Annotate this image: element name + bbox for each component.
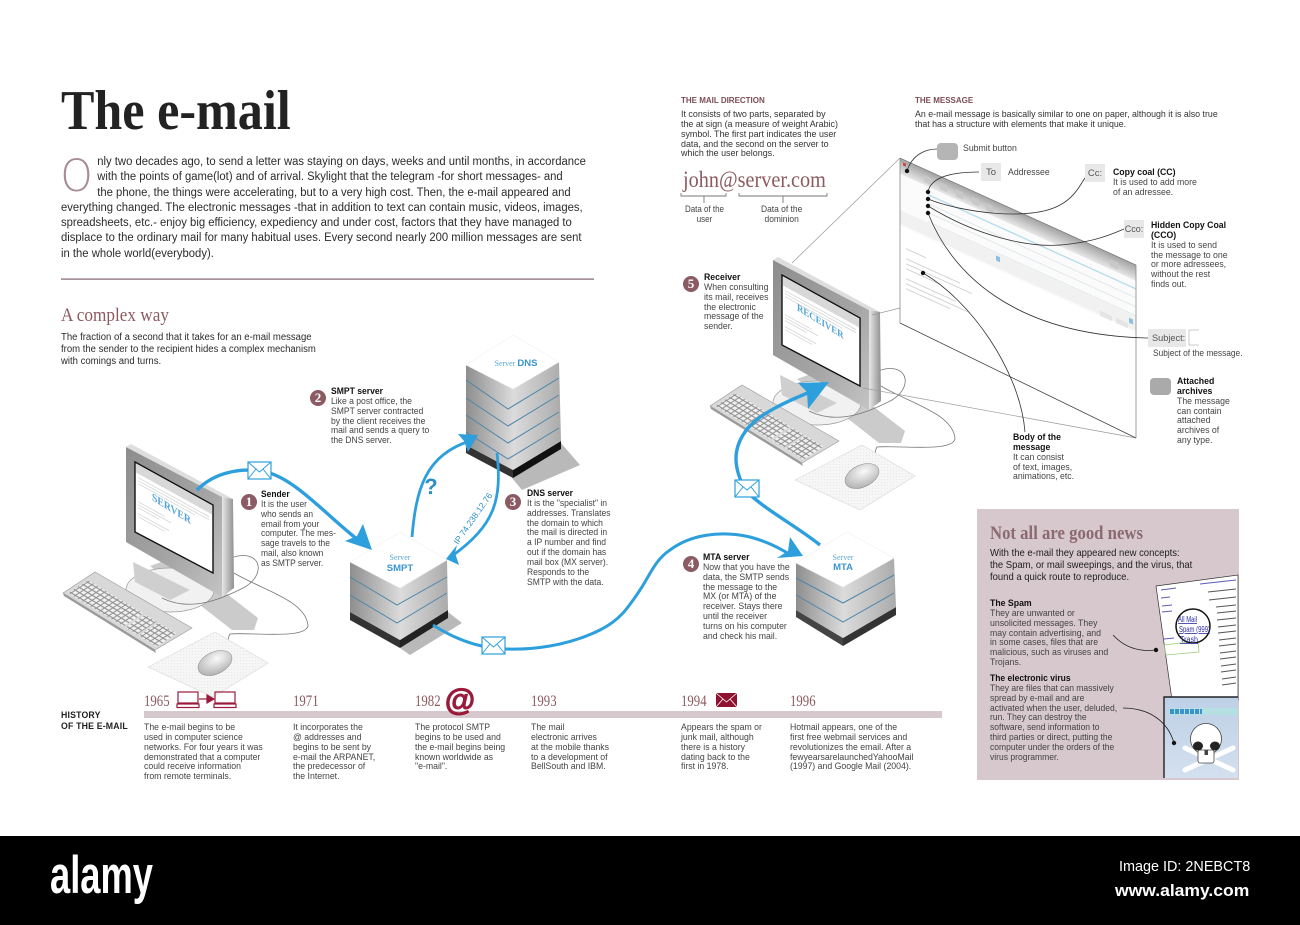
text: copy coal: It is used to add more	[1113, 176, 1197, 187]
text: DNS server: out if the domain has	[527, 546, 606, 557]
image id: Image ID: 2NEBCT8	[1119, 858, 1250, 875]
year 1982: 1982	[415, 693, 441, 710]
intro paragraph: displace to the ordinary mail for many habitual uses. Every second nearly 200 million messages are sent	[61, 232, 582, 244]
text: MTA server: and check his mail.	[703, 630, 777, 641]
text: DNS server: the domain to which	[527, 517, 603, 528]
server: SMPT: SMPT	[387, 563, 413, 574]
text 1993	[531, 721, 609, 771]
text: the spam: unsolicited messages. They	[990, 617, 1097, 628]
timeline bar	[144, 711, 942, 718]
heading: a complex way: A complex way	[61, 305, 169, 326]
text: body of the message: It can consist	[1013, 451, 1064, 462]
text: hidden copy coal: or more adressees,	[1151, 258, 1226, 269]
text: sender: mail, also known	[261, 547, 323, 558]
text: copy coal	[1113, 166, 1197, 197]
text: sender: as SMTP server.	[261, 557, 323, 568]
text: the message: that has a structure with elements that make it unique.	[915, 118, 1126, 129]
text: sender: computer. The mes-	[261, 527, 336, 538]
number 5	[683, 276, 699, 292]
leader lines for message elements	[907, 149, 1148, 432]
icon: submit button	[937, 143, 958, 160]
year 1993: 1993	[531, 693, 557, 710]
text: the mail direction	[681, 108, 838, 158]
text: the mail direction: the at sign (a measure of weight Arabic)	[681, 118, 838, 129]
image: spam inbox	[1156, 575, 1238, 700]
heading: history of the e-mail: OF THE E-MAIL	[61, 720, 128, 731]
server: DNS: Server DNS	[495, 358, 537, 369]
text: copy coal: of an adressee.	[1113, 186, 1173, 197]
label: subject of the message: Subject of the message.	[1153, 347, 1243, 358]
text: DNS server: addresses. Translates	[527, 507, 610, 518]
label: data of the dominion: Data of the	[761, 203, 802, 214]
intro paragraph: nly two decades ago, to send a letter was staying on days, weeks and until months, in accordance	[97, 156, 586, 168]
icon: envelope on sender arrow	[248, 462, 271, 479]
text: the mail direction: which the user belongs.	[681, 147, 775, 158]
text 1982: "e-mail".	[415, 760, 447, 771]
text 1993: The mail	[531, 721, 564, 732]
text: the spam: They are unwanted or	[990, 607, 1075, 618]
text: the electronic virus: software, send information to	[990, 721, 1100, 732]
example address: john@server.com	[683, 167, 826, 192]
text: the mail direction: symbol. The first part indicates the user	[681, 128, 836, 139]
server: MTA: Server	[833, 553, 854, 562]
text 1982: the e-mail begins being	[415, 741, 505, 752]
text: body of the message: of text, images,	[1013, 461, 1072, 472]
text: attached archives: The message	[1177, 395, 1230, 406]
text 1993: BellSouth and IBM.	[531, 760, 606, 771]
text: a complex way: from the sender to the recipient hides a complex mechanism	[61, 344, 316, 355]
leader dots	[905, 169, 930, 275]
text: the message: An e-mail message is basically similar to one on paper, although it is also true	[915, 108, 1218, 119]
text: hidden copy coal: finds out.	[1151, 278, 1186, 289]
arrow: DNS to SMPT	[446, 453, 498, 565]
text: receiver: sender.	[704, 320, 733, 331]
text: SMPT server: Like a post office, the	[331, 395, 412, 406]
text: MTA server: turns on his computer	[703, 620, 787, 631]
year 1965: 1965	[144, 693, 170, 710]
text: MTA server: until the receiver	[703, 610, 767, 621]
label: data of the user: Data of the	[685, 203, 724, 214]
text: sender: who sends an	[261, 508, 313, 519]
icon: envelope 1994	[716, 693, 737, 707]
text: attached archives	[1177, 375, 1230, 445]
text: MTA server	[703, 551, 790, 641]
text: not all are good news intro	[990, 548, 1192, 583]
text 1971: It incorporates the	[293, 721, 363, 732]
text: receiver: When consulting	[704, 281, 768, 292]
label: IP address: IP 74.238.12.76	[451, 491, 494, 546]
text 1994: junk mail, although	[681, 731, 754, 742]
computer: sender: SERVER	[152, 491, 192, 528]
alamy logo: alamy	[50, 846, 153, 905]
arrow: sender to SMPT	[197, 470, 372, 550]
text: the electronic virus: virus programmer.	[990, 751, 1059, 762]
text 1971	[293, 721, 375, 781]
leader dots: spam and virus	[1154, 648, 1176, 745]
text: hidden copy coal: (CCO)	[1151, 229, 1176, 240]
text: hidden copy coal: without the rest	[1151, 268, 1210, 279]
text: body of the message	[1013, 431, 1074, 481]
text: not all are good news intro: With the e-mail they appeared new concepts:	[990, 548, 1180, 559]
text 1994: Appears the spam or	[681, 721, 762, 732]
intro paragraph: in the whole world(everybody).	[61, 248, 214, 260]
text: DNS server: It is the "specialist" in	[527, 497, 607, 508]
text 1982	[415, 721, 505, 771]
heading: the message: THE MESSAGE	[915, 95, 973, 105]
text: a complex way: with comings and turns.	[61, 356, 161, 367]
bottom black band	[0, 836, 1300, 925]
text: the message	[915, 108, 1218, 129]
field: Cc	[1085, 164, 1105, 182]
text: MTA server: MTA server	[703, 551, 750, 562]
text 1996: revolutionizes the email. After a	[790, 741, 911, 752]
image: virus skull window	[1164, 697, 1238, 778]
text: attached archives: any type.	[1177, 434, 1212, 445]
text: SMPT server: the DNS server.	[331, 434, 392, 445]
heading: history of the e-mail	[61, 709, 128, 731]
number 1: 1	[246, 494, 252, 509]
field: To	[981, 163, 1001, 181]
text: SMPT server: SMPT server	[331, 385, 383, 396]
text: the mail direction: data, and the second on the server to	[681, 138, 829, 149]
text: SMPT server: mail and sends a query to	[331, 424, 429, 435]
text: receiver: message of the	[704, 310, 764, 321]
text: the spam: in some cases, files that are	[990, 636, 1098, 647]
arrow: SMPT to MTA	[433, 534, 803, 649]
text: the spam: Trojans.	[990, 656, 1021, 667]
text: DNS server: Responds to the	[527, 566, 589, 577]
intro paragraph: spreadsheets, etc.- enjoy big efficiency, expediency and under cost, factors that they have managed to	[61, 217, 572, 229]
text 1965: could receive information	[144, 760, 241, 771]
number 3: 3	[510, 494, 516, 509]
text: DNS server: DNS server	[527, 487, 573, 498]
text 1971: @ addresses and	[293, 731, 361, 742]
text: sender: email from your	[261, 518, 319, 529]
server: SMPT	[350, 532, 462, 655]
text: DNS server: mail box (MX server).	[527, 556, 608, 567]
text: receiver	[704, 271, 768, 331]
text: a complex way: The fraction of a second that it takes for an e-mail message	[61, 332, 312, 343]
text 1994	[680, 721, 762, 771]
text 1971: begins to be sent by	[293, 741, 371, 752]
icon: at sign 1982: @	[445, 682, 475, 717]
text: hidden copy coal: Hidden Copy Coal	[1151, 219, 1226, 230]
drop cap: O	[61, 147, 92, 203]
field: Subject	[1148, 329, 1199, 347]
year 1996: 1996	[790, 693, 816, 710]
text 1994: there is a history	[681, 741, 745, 752]
text: sender: It is the user	[261, 498, 307, 509]
text: the electronic virus: The electronic virus	[990, 672, 1071, 683]
text: DNS server: SMTP with the data.	[527, 576, 604, 587]
text: DNS server: the mail is directed in	[527, 526, 607, 537]
field: Subject: Subject:	[1152, 333, 1185, 343]
year 1994: 1994	[681, 693, 707, 710]
text: not all are good news intro: the Spam, or mail sweepings, and the virus, that	[990, 560, 1192, 571]
field: Cc: Cc:	[1088, 168, 1102, 179]
text 1965: from remote terminals.	[144, 770, 231, 781]
text 1982: The protocol SMTP	[415, 721, 490, 732]
text 1965	[144, 721, 263, 781]
text 1993: electronic arrives	[531, 731, 597, 742]
text 1993: at the mobile thanks	[531, 741, 609, 752]
text: the mail direction: It consists of two parts, separated by	[681, 108, 826, 119]
text: DNS server: a IP number and find	[527, 536, 606, 547]
text: the spam: may contain advertising, and	[990, 627, 1101, 638]
text 1971: the Internet.	[293, 770, 340, 781]
server: MTA: MTA	[833, 562, 853, 573]
number 1	[241, 494, 257, 510]
title: The e-mail	[61, 80, 291, 142]
server: MTA	[796, 532, 896, 646]
text: MTA server: the message to the	[703, 581, 777, 592]
text: attached archives: archives	[1177, 385, 1212, 396]
text: attached archives: archives of	[1177, 424, 1219, 435]
image: spam inbox: Trash	[1180, 635, 1198, 644]
text: the electronic virus: spread by e-mail and are	[990, 692, 1084, 703]
panel: not all are good news background	[977, 509, 1239, 780]
computer: sender	[63, 444, 308, 697]
server: DNS	[466, 335, 580, 490]
text: SMPT server	[331, 385, 429, 445]
image: spam inbox: Spam (999)	[1179, 625, 1210, 634]
icon: two computers 1965	[177, 692, 236, 708]
text: SMPT server: SMPT server contracted	[331, 405, 423, 416]
text 1965: networks. For four years it was	[144, 741, 263, 752]
intro paragraph	[61, 156, 586, 260]
text: the electronic virus	[990, 672, 1117, 762]
text 1993: to a development of	[531, 751, 608, 762]
text 1996	[790, 721, 913, 771]
heading: history of the e-mail: HISTORY	[61, 709, 101, 720]
text: the electronic virus: computer under the orders of the	[990, 741, 1114, 752]
field: Cco	[1124, 220, 1144, 238]
text: hidden copy coal: It is used to send	[1151, 239, 1217, 250]
field: To: To	[986, 167, 996, 178]
text 1996: (1997) and Google Mail (2004).	[790, 760, 911, 771]
text: the spam: malicious, such as viruses and	[990, 646, 1108, 657]
text: copy coal: Copy coal (CC)	[1113, 166, 1175, 177]
text: MTA server: data, the SMTP sends	[703, 571, 789, 582]
text: MTA server: MX (or MTA) of the	[703, 590, 776, 601]
website: www.alamy.com	[1115, 881, 1249, 900]
text: the electronic virus: third parties or direct, putting the	[990, 731, 1112, 742]
text: hidden copy coal	[1151, 219, 1228, 289]
text: attached archives: can contain	[1177, 405, 1222, 416]
text 1996: Hotmail appears, one of the	[790, 721, 897, 732]
text 1965: used in computer science	[144, 731, 243, 742]
label: data of the dominion: dominion	[765, 213, 799, 224]
heading: not all are good news: Not all are good news	[990, 523, 1143, 544]
intro paragraph: everything changed. The electronic messages -that in addition to text can contain music, videos, images,	[61, 202, 583, 214]
divider	[61, 278, 594, 280]
text: sender: sage travels to the	[261, 537, 330, 548]
text: receiver: Receiver	[704, 271, 740, 282]
icon: envelope on SMPT arrow	[482, 637, 505, 654]
text: the electronic virus: They are files that can massively	[990, 682, 1114, 693]
icon: attached archives	[1150, 378, 1171, 395]
text: the electronic virus: run. They can destroy the	[990, 711, 1087, 722]
text 1965: demonstrated that a computer	[144, 751, 260, 762]
text: receiver: the electronic	[704, 301, 756, 312]
text 1994: first in 1978.	[681, 760, 729, 771]
icon: question mark: ?	[424, 474, 438, 499]
text: sender	[261, 488, 336, 568]
number 3	[505, 494, 521, 510]
number 2	[310, 390, 326, 406]
text: not all are good news intro: found a quick route to reproduce.	[990, 572, 1129, 583]
text: a complex way	[61, 332, 316, 367]
server: SMPT: Server	[390, 553, 411, 562]
bracket: user and domain	[681, 193, 827, 203]
number 4: 4	[688, 556, 694, 571]
text: MTA server: Now that you have the	[703, 561, 790, 572]
text: body of the message: Body of the	[1013, 431, 1061, 442]
number 4	[683, 556, 699, 572]
field: Cco: Cco:	[1125, 224, 1143, 234]
text: the electronic virus: activated when the user, deluded,	[990, 702, 1117, 713]
mail window diagram	[792, 158, 1136, 438]
number 5: 5	[688, 276, 694, 291]
text: receiver: its mail, receives	[704, 291, 768, 302]
intro paragraph: the phone, the things were accelerating, but to a very high cost. Then, the e-mail appeared and	[97, 187, 571, 199]
label: data of the user: user	[697, 213, 712, 224]
text: DNS server	[527, 487, 610, 587]
arrow: SMPT to DNS	[412, 434, 478, 537]
text 1971: e-mail the ARPANET,	[293, 751, 375, 762]
icon: envelope on receiver arrow	[735, 480, 759, 497]
text 1982: known worldwide as	[415, 751, 493, 762]
leader lines: spam and virus	[1113, 635, 1174, 743]
text 1996: first free webmail services and	[790, 731, 907, 742]
text: MTA server: receiver. Stays there	[703, 600, 782, 611]
text: hidden copy coal: the message to one	[1151, 249, 1228, 260]
text 1996: fewyearsarelaunchedYahooMail	[790, 751, 913, 762]
text: the spam: The Spam	[990, 597, 1032, 608]
arrow: MTA to receiver	[736, 382, 829, 545]
text: sender: Sender	[261, 488, 290, 499]
text: SMPT server: by the client receives the	[331, 415, 425, 426]
intro paragraph: with the points of game(lot) and of arrival. Skylight that the telegram -for short messages- and	[97, 171, 563, 183]
text 1971: the predecessor of	[293, 760, 365, 771]
text: body of the message: animations, etc.	[1013, 470, 1074, 481]
label: data of the dominion	[761, 203, 802, 224]
label: submit button: Submit button	[963, 142, 1017, 153]
computer: receiver	[710, 257, 955, 510]
text: attached archives: Attached	[1177, 375, 1214, 386]
text 1965: The e-mail begins to be	[144, 721, 235, 732]
image: spam inbox: All Mail	[1178, 615, 1197, 624]
label: addressee: Addressee	[1008, 166, 1050, 177]
text: the spam	[990, 597, 1108, 667]
year 1971: 1971	[293, 693, 319, 710]
text 1982: begins to be used and	[415, 731, 501, 742]
heading: the mail direction: THE MAIL DIRECTION	[681, 95, 765, 105]
computer: receiver: RECEIVER	[797, 302, 844, 342]
number 2: 2	[315, 390, 321, 405]
label: data of the user	[685, 203, 724, 224]
text: body of the message: message	[1013, 441, 1050, 452]
text: attached archives: attached	[1177, 414, 1210, 425]
text 1994: dating back to the	[681, 751, 750, 762]
